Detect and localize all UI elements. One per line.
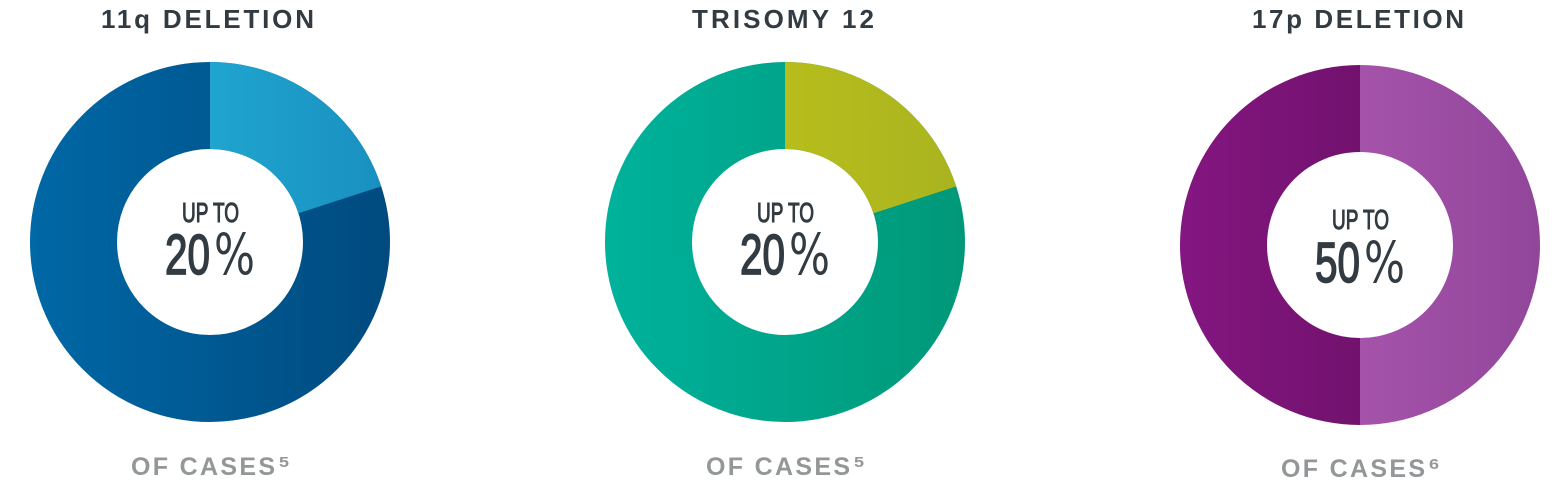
centre value: up to 50% — [1315, 204, 1405, 296]
heading: 11q deletion: 11q DELETION — [101, 4, 314, 34]
panel: trisomy 12 — [648, 4, 956, 481]
donut chart: 11q deletion 20% — [74, 62, 381, 378]
caption: of cases: OF CASES — [706, 453, 850, 481]
panel: 11q deletion — [74, 4, 381, 481]
heading: trisomy 12: TRISOMY 12 — [692, 4, 874, 34]
centre value: up to 20%: % — [789, 222, 830, 288]
caption: of cases: 5 — [854, 454, 864, 471]
centre value: up to 20% — [740, 197, 830, 288]
centre value: up to 20%: UP TO — [757, 197, 814, 228]
centre value: up to 20% — [165, 197, 255, 288]
centre value: up to 50%: UP TO — [1332, 204, 1389, 235]
centre value: up to 20%: UP TO — [182, 197, 239, 228]
caption: of cases: 6 — [1429, 456, 1439, 473]
donut chart: 17p deletion 50% — [1180, 65, 1540, 425]
panel: 17p deletion — [1180, 4, 1540, 483]
caption: of cases: OF CASES — [1281, 455, 1425, 483]
centre value: up to 50%: 50 — [1315, 231, 1360, 295]
centre value: up to 20%: 20 — [740, 223, 785, 287]
centre value: up to 20%: 20 — [165, 223, 210, 287]
caption: of cases: 5 — [279, 454, 289, 471]
heading: 17p deletion: 17p DELETION — [1252, 4, 1464, 34]
centre value: up to 20%: % — [214, 222, 255, 288]
donut chart: trisomy 12 20% — [648, 62, 956, 378]
caption: of cases: OF CASES — [131, 453, 275, 481]
centre value: up to 50%: % — [1364, 230, 1405, 296]
